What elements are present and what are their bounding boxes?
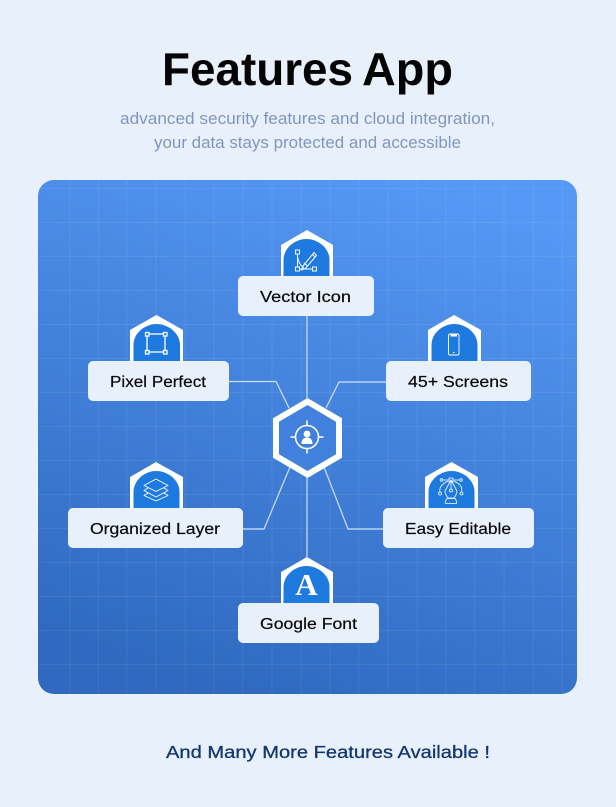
icon: pen tool [425,462,478,512]
feature: 45+ Screens [386,315,531,401]
feature: 45+ Screens: 45+ Screens [408,374,508,391]
icon: letter A [281,557,333,607]
footer note: And Many More Features Available ! [166,742,490,762]
feature: Google Font [238,557,379,643]
icon: pen vector [281,230,333,280]
icon: layers [130,462,183,512]
feature: Pixel Perfect: Pixel Perfect [110,374,207,391]
feature: Vector Icon: Vector Icon [260,289,351,306]
feature: Organized Layer: Organized Layer [90,521,220,538]
title: App [362,43,453,95]
connector lines [229,316,386,557]
feature: Google Font: Google Font [260,616,358,633]
feature: Easy Editable [383,462,534,548]
panel: features diagram [38,180,577,694]
icon: phone [428,315,481,365]
feature: Vector Icon [238,230,374,316]
subtitle: your data stays protected and accessible [154,133,461,152]
icon: letter A: A [295,567,318,602]
feature: Pixel Perfect [88,315,229,401]
feature: Easy Editable: Easy Editable [405,521,511,538]
subtitle [120,109,495,152]
icon: selection square [130,315,183,365]
feature: Organized Layer [68,462,243,548]
center hexagon icon [276,402,339,474]
title [162,43,453,95]
title: Features [162,43,353,95]
subtitle: advanced security features and cloud integration, [120,109,495,128]
